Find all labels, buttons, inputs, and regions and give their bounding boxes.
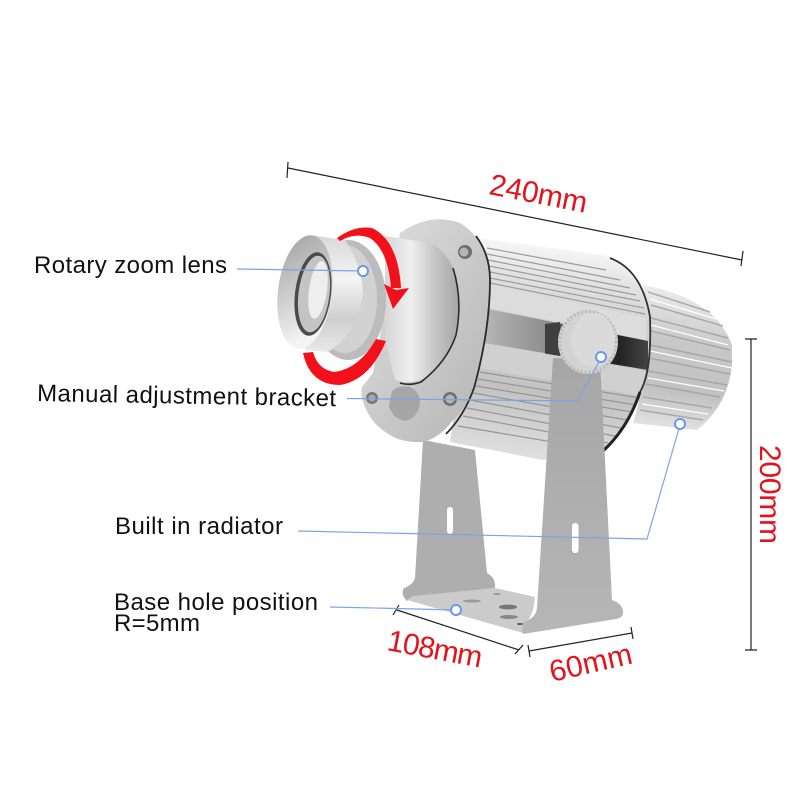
bracket base plate: [407, 588, 535, 633]
dimension: 200mm: [745, 339, 786, 650]
lower panel: [480, 343, 646, 396]
callout: manual adjustment bracket: [37, 352, 606, 412]
dimension: 60mm: [528, 627, 635, 689]
top fins: [487, 248, 645, 314]
upper panel: [490, 285, 646, 340]
rotation arrow: [303, 227, 409, 385]
rear housing edge: [610, 258, 650, 392]
dimension: 108mm: 108mm: [385, 624, 485, 674]
lens barrel: [271, 232, 459, 384]
dimension: 108mm: [385, 605, 523, 674]
front bracket leg: [522, 358, 623, 634]
main housing: [450, 238, 650, 460]
callout: base hole position: Base hole position: [114, 589, 318, 616]
radiator fins: [633, 285, 732, 430]
dimension: 200mm: 200mm: [753, 445, 786, 544]
callout: base hole position: R=5mm: [114, 610, 200, 637]
adjustment slot: [484, 309, 648, 370]
lens cylinder: [305, 235, 363, 352]
dimension: 240mm: 240mm: [487, 168, 590, 220]
callout: rotary zoom lens: Rotary zoom lens: [34, 252, 227, 279]
bracket axle: [545, 322, 560, 356]
callout: built in radiator: Built in radiator: [115, 513, 283, 540]
illustration: gobo projector: [271, 219, 732, 634]
lens collar: [310, 240, 386, 360]
lower fins: [458, 372, 640, 450]
callout: rotary zoom lens: [34, 252, 368, 279]
dimension: 60mm: 60mm: [546, 638, 635, 689]
rear bracket leg: [403, 440, 495, 601]
lens front ring: [271, 232, 339, 352]
callout: base hole position: [114, 589, 461, 637]
callout: manual adjustment bracket: Manual adjustment bracket: [37, 380, 337, 412]
lens cone: [385, 236, 458, 382]
dimension: 240mm: [287, 162, 743, 266]
flange screws: [458, 245, 472, 259]
adjustment knob: [558, 310, 618, 374]
callout: built in radiator: [115, 419, 685, 540]
front flange plate: [361, 219, 490, 442]
flange bolt: [389, 386, 420, 421]
front bracket slot: [572, 523, 578, 553]
rear bracket slot: [447, 507, 453, 534]
